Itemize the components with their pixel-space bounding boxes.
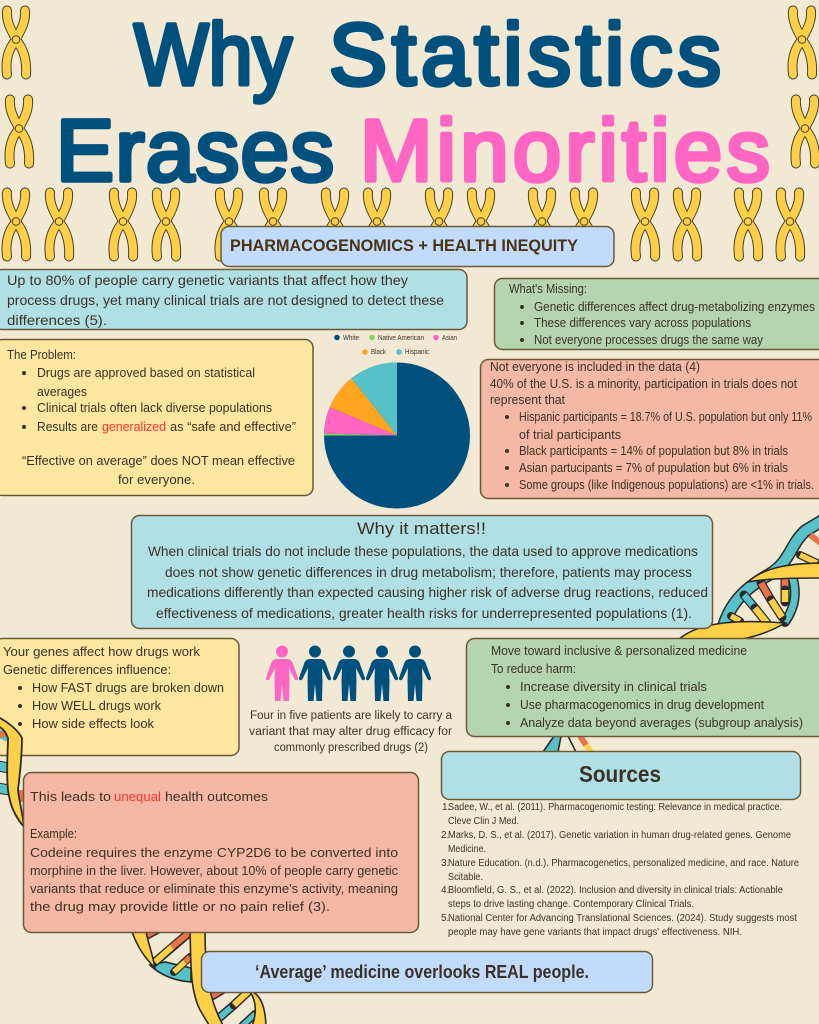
reference list [441, 802, 799, 938]
pie chart: population by group [324, 335, 470, 508]
heading: sources: Sources [579, 761, 661, 787]
panel: why it matters: medications differently than expected causing higher risk of adverse drug reactions, reduced [147, 584, 708, 600]
panel: your genes affect how drugs work: How side effects look [32, 716, 154, 731]
panel: what's missing: These differences vary across populations [534, 316, 751, 330]
chart legend: White [343, 335, 359, 342]
panel: unequal health outcomes: Codeine requires the enzyme CYP2D6 to be converted into [30, 845, 398, 860]
panel: unequal health outcomes: Example: [30, 826, 77, 841]
panel: unequal health outcomes: variants that reduce or eliminate this enzyme's activity, meaning [30, 881, 398, 896]
panel: unequal health outcomes: This leads to [30, 789, 111, 804]
panel: the problem: as “safe and effective” [170, 420, 296, 434]
panel: not everyone is included: of trial participants [519, 428, 621, 442]
reference list: people may have gene variants that impact drugs' effectiveness. NIH. [448, 927, 742, 938]
chart legend [334, 335, 457, 356]
title: Erases [56, 102, 334, 200]
panel: inclusive and personalized medicine [466, 638, 819, 736]
reference list: 5. [441, 913, 449, 924]
reference list: 3. [441, 858, 449, 869]
panel: unequal health outcomes: the drug may provide little or no pain relief (3). [30, 899, 330, 914]
DNA helix: middle fragment [543, 736, 591, 752]
panel: what's missing: What's Missing: [509, 282, 587, 296]
panel: the problem: Clinical trials often lack diverse populations [37, 401, 272, 415]
banner: subtitle: PHARMACOGENOMICS + HEALTH INEQUITY [230, 236, 579, 255]
panel: what's missing [494, 278, 819, 350]
panel: what's missing: Not everyone processes drugs the same way [534, 333, 764, 347]
reference list: 1. [442, 802, 450, 813]
reference list: Scitable. [448, 872, 483, 883]
title: Why [134, 6, 292, 104]
banner: subtitle [221, 226, 614, 266]
reference list: Marks, D. S., et al. (2017). Genetic variation in human drug-related genes. Genome [448, 830, 791, 841]
panel: inclusive and personalized medicine: Increase diversity in clinical trials [520, 679, 707, 694]
reference list: steps to drive lasting change. Contemporary Clinical Trials. [448, 899, 694, 910]
panel: why it matters [132, 516, 712, 628]
reference list: Nature Education. (n.d.). Pharmacogenetics, personalized medicine, and race. Nature [448, 858, 799, 869]
panel: genetic variants fact: differences (5). [7, 312, 107, 328]
chart legend: Asian [442, 335, 457, 342]
panel: not everyone is included: 40% of the U.S. is a minority, participation in trials does not [490, 377, 797, 391]
panel: not everyone is included: represent that [490, 393, 566, 407]
caption: four in five patients: Four in five patients are likely to carry a [250, 710, 453, 722]
panel: inclusive and personalized medicine: To reduce harm: [491, 661, 576, 676]
closing banner: ‘Average’ medicine overlooks REAL people. [255, 962, 589, 982]
panel: genetic variants fact: Up to 80% of people carry genetic variants that affect how they [7, 272, 408, 288]
panel: not everyone is included: Black participants = 14% of population but 8% in trials [519, 444, 788, 458]
caption: four in five patients: commonly prescribed drugs (2) [274, 742, 428, 754]
panel: the problem: generalized [102, 420, 166, 434]
panel: genetic variants fact: process drugs, yet many clinical trials are not designed to detect these [7, 292, 444, 308]
reference list: Medicine. [448, 844, 486, 855]
panel: inclusive and personalized medicine: Use pharmacogenomics in drug development [520, 697, 764, 712]
title: Minorities [360, 102, 770, 200]
chart legend: Hispanic [405, 349, 429, 356]
panel: unequal health outcomes: unequal [114, 789, 161, 804]
panel: your genes affect how drugs work [0, 638, 239, 756]
panel: why it matters: Why it matters!! [357, 519, 486, 538]
reference list: Sadee, W., et al. (2011). Pharmacogenomic testing: Relevance in medical practice. [448, 802, 782, 813]
closing banner [202, 952, 652, 992]
panel: the problem: averages [37, 385, 87, 399]
chart legend: Native American [378, 335, 424, 342]
icon: five people, one highlighted [266, 646, 431, 701]
panel: why it matters: effectiveness of medications, greater health risks for underrepresented populations (1). [156, 605, 692, 621]
panel: unequal health outcomes [24, 772, 418, 932]
DNA helix: left [0, 717, 26, 827]
panel: not everyone is included: Asian partucipants = 7% of pupulation but 6% in trials [519, 461, 788, 475]
panel: unequal health outcomes: morphine in the liver. However, about 10% of people carry genetic [30, 863, 398, 878]
reference list: 4. [441, 885, 449, 896]
title: Statistics [329, 6, 721, 104]
panel: the problem: Drugs are approved based on statistical [37, 366, 255, 380]
panel: your genes affect how drugs work: How WELL drugs work [32, 698, 161, 713]
caption: four in five patients [249, 710, 453, 754]
panel: inclusive and personalized medicine: Move toward inclusive & personalized medicine [491, 643, 747, 658]
DNA helix: right [678, 516, 819, 642]
panel: unequal health outcomes: health outcomes [165, 789, 269, 804]
panel: the problem: “Effective on average” does NOT mean effective [22, 454, 295, 468]
panel: why it matters: does not show genetic differences in drug metabolism; therefore, patients may process [165, 564, 692, 580]
panel: the problem [0, 340, 313, 496]
panel: not everyone is included: Not everyone is included in the data (4) [490, 360, 700, 374]
panel: not everyone is included [480, 360, 819, 498]
reference list: National Center for Advancing Translational Sciences. (2024). Study suggests most [448, 913, 797, 924]
title [56, 6, 770, 200]
panel: why it matters: When clinical trials do not include these populations, the data used to approve medications [148, 543, 698, 559]
reference list: Bloomfield, G. S., et al. (2022). Inclusion and diversity in clinical trials: Actionable [448, 885, 783, 896]
panel: the problem: The Problem: [7, 348, 76, 362]
DNA helix: bottom left [132, 928, 266, 1024]
panel: your genes affect how drugs work: Your genes affect how drugs work [3, 644, 201, 659]
reference list: Cleve Clin J Med. [448, 816, 519, 827]
chromosome column: top left and right [6, 10, 815, 164]
panel: the problem: Results are [37, 420, 98, 434]
panel: inclusive and personalized medicine: Analyze data beyond averages (subgroup analysis) [520, 715, 803, 730]
panel: genetic variants fact [0, 270, 467, 330]
chromosome row [6, 192, 800, 256]
chart legend: Black [371, 349, 386, 356]
panel: your genes affect how drugs work: How FAST drugs are broken down [32, 680, 224, 695]
heading: sources [442, 752, 800, 800]
panel: your genes affect how drugs work: Genetic differences influence: [3, 662, 171, 677]
reference list: 2. [441, 830, 449, 841]
caption: four in five patients: variant that may alter drug efficacy for [249, 726, 452, 738]
panel: the problem: for everyone. [118, 473, 195, 487]
